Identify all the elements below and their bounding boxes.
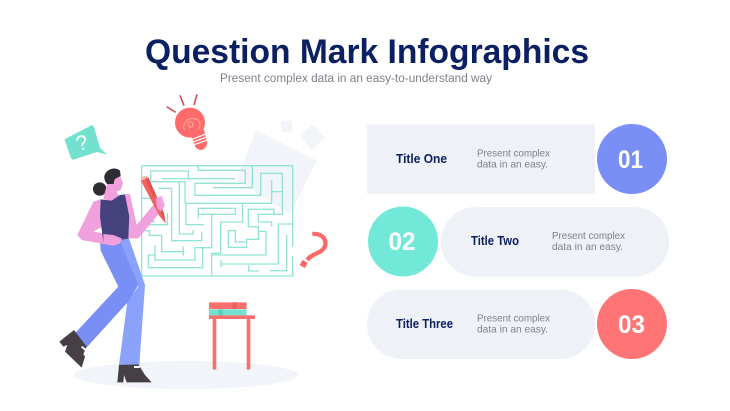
item one number badge: 01 bbox=[618, 146, 643, 174]
item one description: Present complex bbox=[477, 148, 551, 160]
item two heading: Title Two bbox=[471, 234, 519, 248]
icon: speech bubble with question mark bbox=[65, 125, 107, 160]
item three number badge: 03 bbox=[618, 311, 645, 339]
panel: item one bbox=[367, 124, 667, 194]
illustration: stool with books bbox=[209, 302, 255, 370]
illustration: grey background squares bbox=[237, 121, 325, 214]
illustration: maze bbox=[142, 166, 293, 276]
item one description: data in an easy. bbox=[477, 158, 548, 170]
illustration: person legs and boots bbox=[59, 237, 152, 382]
subtitle: Present complex data in an easy-to-understand way bbox=[220, 73, 492, 85]
item three description: data in an easy. bbox=[477, 324, 548, 336]
item three number badge bbox=[597, 289, 667, 359]
icon: light bulb bbox=[167, 94, 207, 150]
icon: speech bubble with question mark: ? bbox=[74, 131, 91, 156]
item one heading: Title One bbox=[396, 152, 447, 166]
title: Question Mark Infographics bbox=[145, 33, 589, 71]
illustration: question mark icon bbox=[300, 234, 325, 268]
illustration: person upper body with pencil bbox=[77, 168, 166, 246]
item two description: Present complex bbox=[552, 230, 626, 242]
illustration: floor shadow bbox=[74, 361, 298, 389]
item one number badge bbox=[597, 124, 667, 194]
item two number badge bbox=[368, 206, 438, 276]
item two number badge: 02 bbox=[388, 228, 416, 256]
panel: item three bbox=[367, 289, 667, 359]
item three description: Present complex bbox=[477, 312, 551, 324]
panel: item two bbox=[368, 206, 669, 276]
item two description: data in an easy. bbox=[552, 241, 623, 253]
item three heading: Title Three bbox=[396, 317, 453, 331]
